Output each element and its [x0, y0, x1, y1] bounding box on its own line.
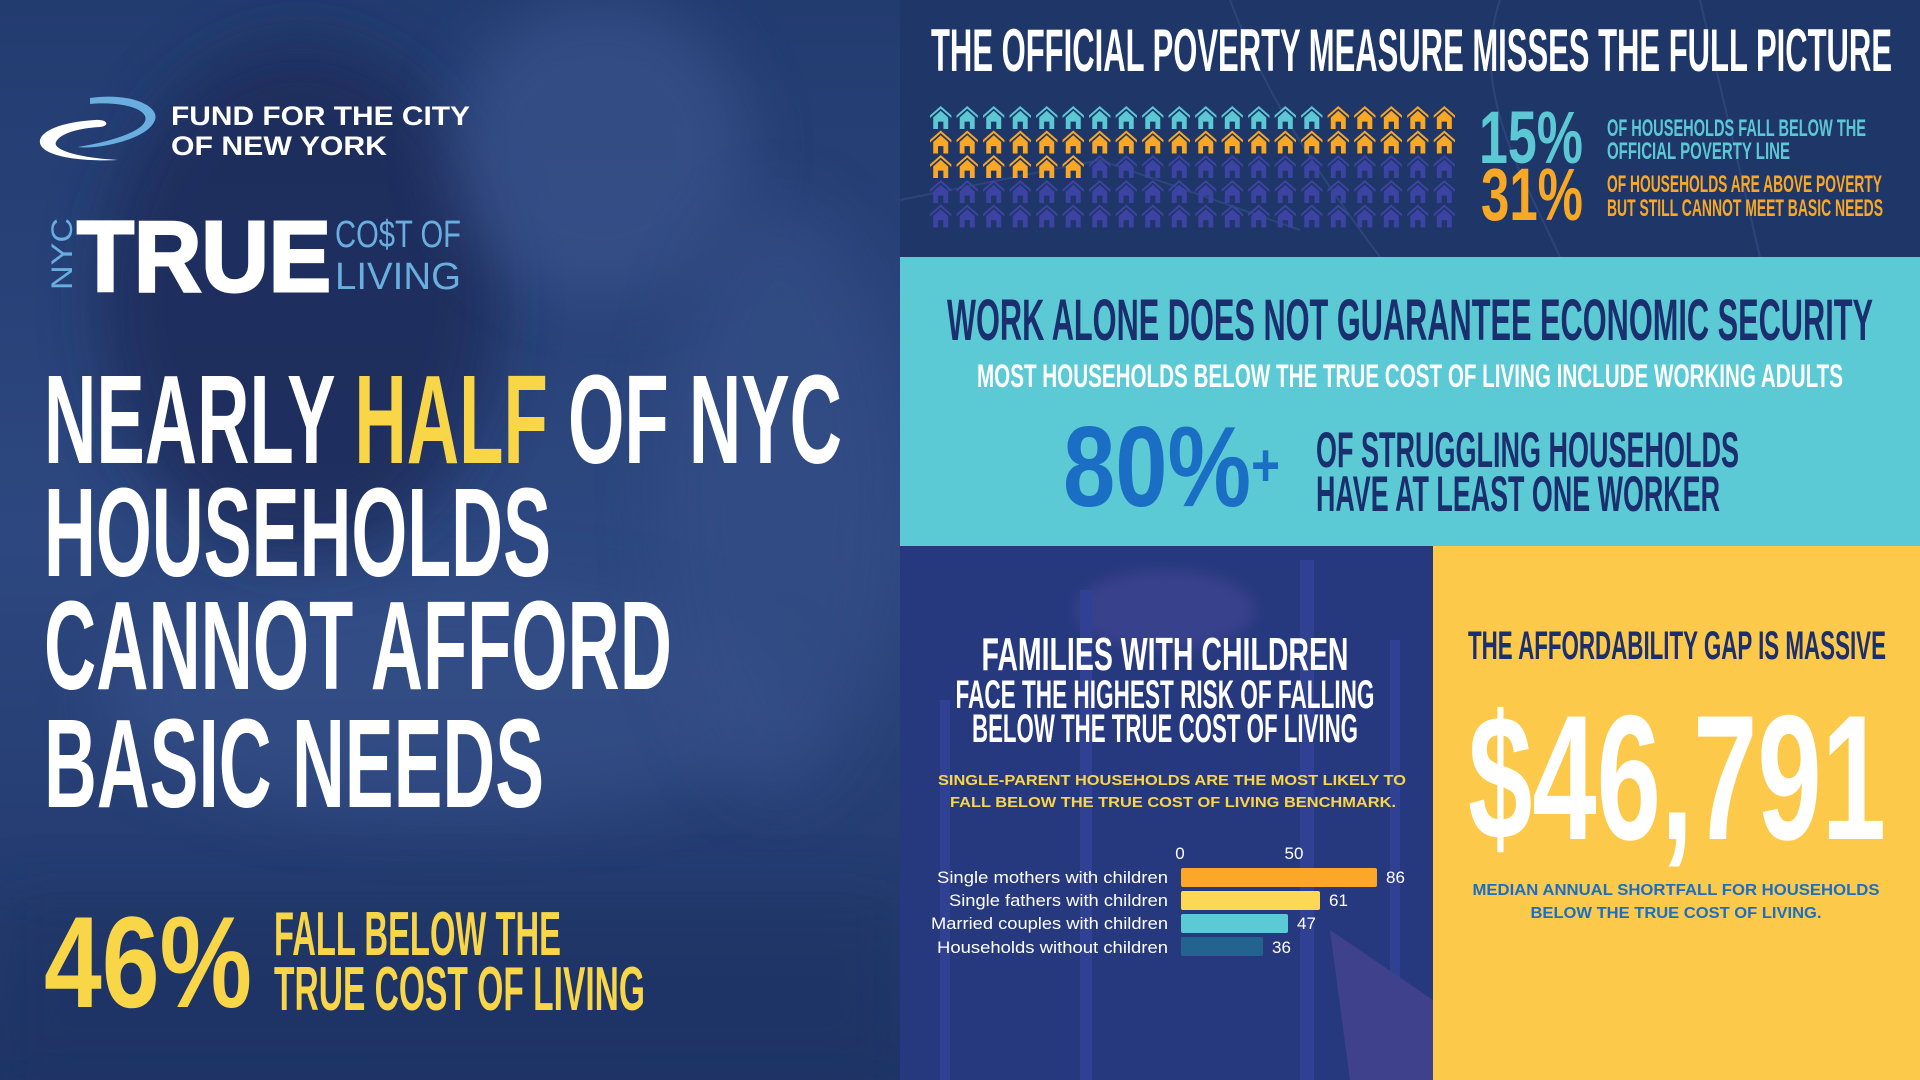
- heading: main headline: NEARLY HALF OF NYC: [44, 349, 842, 490]
- logo: NYC True Cost of Living: NYC: [46, 218, 79, 290]
- subtitle: single-parent households: FALL BELOW THE TRUE COST OF LIVING BENCHMARK.: [950, 794, 1396, 811]
- panel: left hero background: [0, 0, 900, 1080]
- heading: families with children: FAMILIES WITH CHILDREN: [982, 628, 1348, 680]
- logo: NYC True Cost of Living: LIVING: [335, 256, 461, 298]
- logo: NYC True Cost of Living: [46, 201, 461, 313]
- chart: bar chart by household type: Single mothers with children: [937, 868, 1168, 887]
- panel: official poverty measure: [900, 0, 1920, 257]
- heading: main headline: BASIC NEEDS: [44, 693, 544, 834]
- stat: 15% below poverty line: OFFICIAL POVERTY LINE: [1607, 138, 1790, 165]
- logo: NYC True Cost of Living: CO$T OF: [335, 214, 461, 256]
- chart: bar chart by household type: 47: [1297, 914, 1316, 933]
- stat: 80%+: 80%: [1063, 404, 1291, 531]
- chart: bar chart by household type: Married couples with children: [931, 914, 1168, 933]
- stat: 31% above poverty: [1481, 153, 1883, 236]
- stat: 46% fall below: FALL BELOW THE: [274, 900, 561, 969]
- logo: Fund for the City of New York: OF NEW YORK: [171, 131, 388, 161]
- chart: house pictogram: [930, 106, 1455, 228]
- panel: affordability gap: [1433, 546, 1920, 1080]
- heading: main headline: HOUSEHOLDS: [44, 462, 551, 603]
- stat: 15% below poverty line: 15%: [1479, 96, 1583, 179]
- stat: 15% below poverty line: [1479, 96, 1866, 179]
- text: median annual shortfall: [1472, 882, 1880, 922]
- chart: bar chart by household type: 0: [1175, 844, 1185, 863]
- stat: 80%+: +: [1251, 432, 1280, 499]
- logo: Fund for the City of New York: [40, 97, 470, 161]
- stat: 46% fall below: TRUE COST OF LIVING: [274, 955, 645, 1024]
- chart: bar chart by household type: [931, 844, 1405, 957]
- chart: bar chart by household type: 50: [1285, 844, 1303, 863]
- chart: bar chart by household type: Households without children: [937, 938, 1168, 957]
- logo: Fund for the City of New York: FUND FOR THE CITY: [171, 101, 470, 131]
- text: median annual shortfall: MEDIAN ANNUAL SHORTFALL FOR HOUSEHOLDS: [1472, 882, 1880, 899]
- chart: bar chart by household type: 61: [1329, 891, 1348, 910]
- heading: main headline: [44, 349, 842, 834]
- stat: 46% fall below: [44, 889, 645, 1035]
- text: median annual shortfall: BELOW THE TRUE COST OF LIVING.: [1530, 905, 1822, 922]
- stat: 31% above poverty: 31%: [1481, 153, 1583, 236]
- chart: bar chart by household type: 36: [1272, 938, 1291, 957]
- text: struggling households: [1316, 422, 1739, 522]
- panel: families with children: [900, 546, 1433, 1080]
- icon: swoosh: [40, 97, 156, 160]
- panel: work alone: [900, 257, 1920, 546]
- subtitle: single-parent households: SINGLE-PARENT HOUSEHOLDS ARE THE MOST LIKELY TO: [938, 772, 1406, 789]
- subtitle: single-parent households: [938, 772, 1406, 811]
- heading: families with children: [956, 628, 1374, 751]
- heading: main headline: CANNOT AFFORD: [44, 575, 672, 716]
- chart: bar chart by household type: Single fathers with children: [949, 891, 1168, 910]
- stat: 46% fall below: 46%: [44, 889, 252, 1035]
- heading: families with children: FACE THE HIGHEST RISK OF FALLING: [956, 673, 1374, 717]
- logo: NYC True Cost of Living: TRUE: [77, 201, 331, 313]
- heading: families with children: BELOW THE TRUE COST OF LIVING: [972, 707, 1358, 751]
- chart: bar chart by household type: 86: [1386, 868, 1405, 887]
